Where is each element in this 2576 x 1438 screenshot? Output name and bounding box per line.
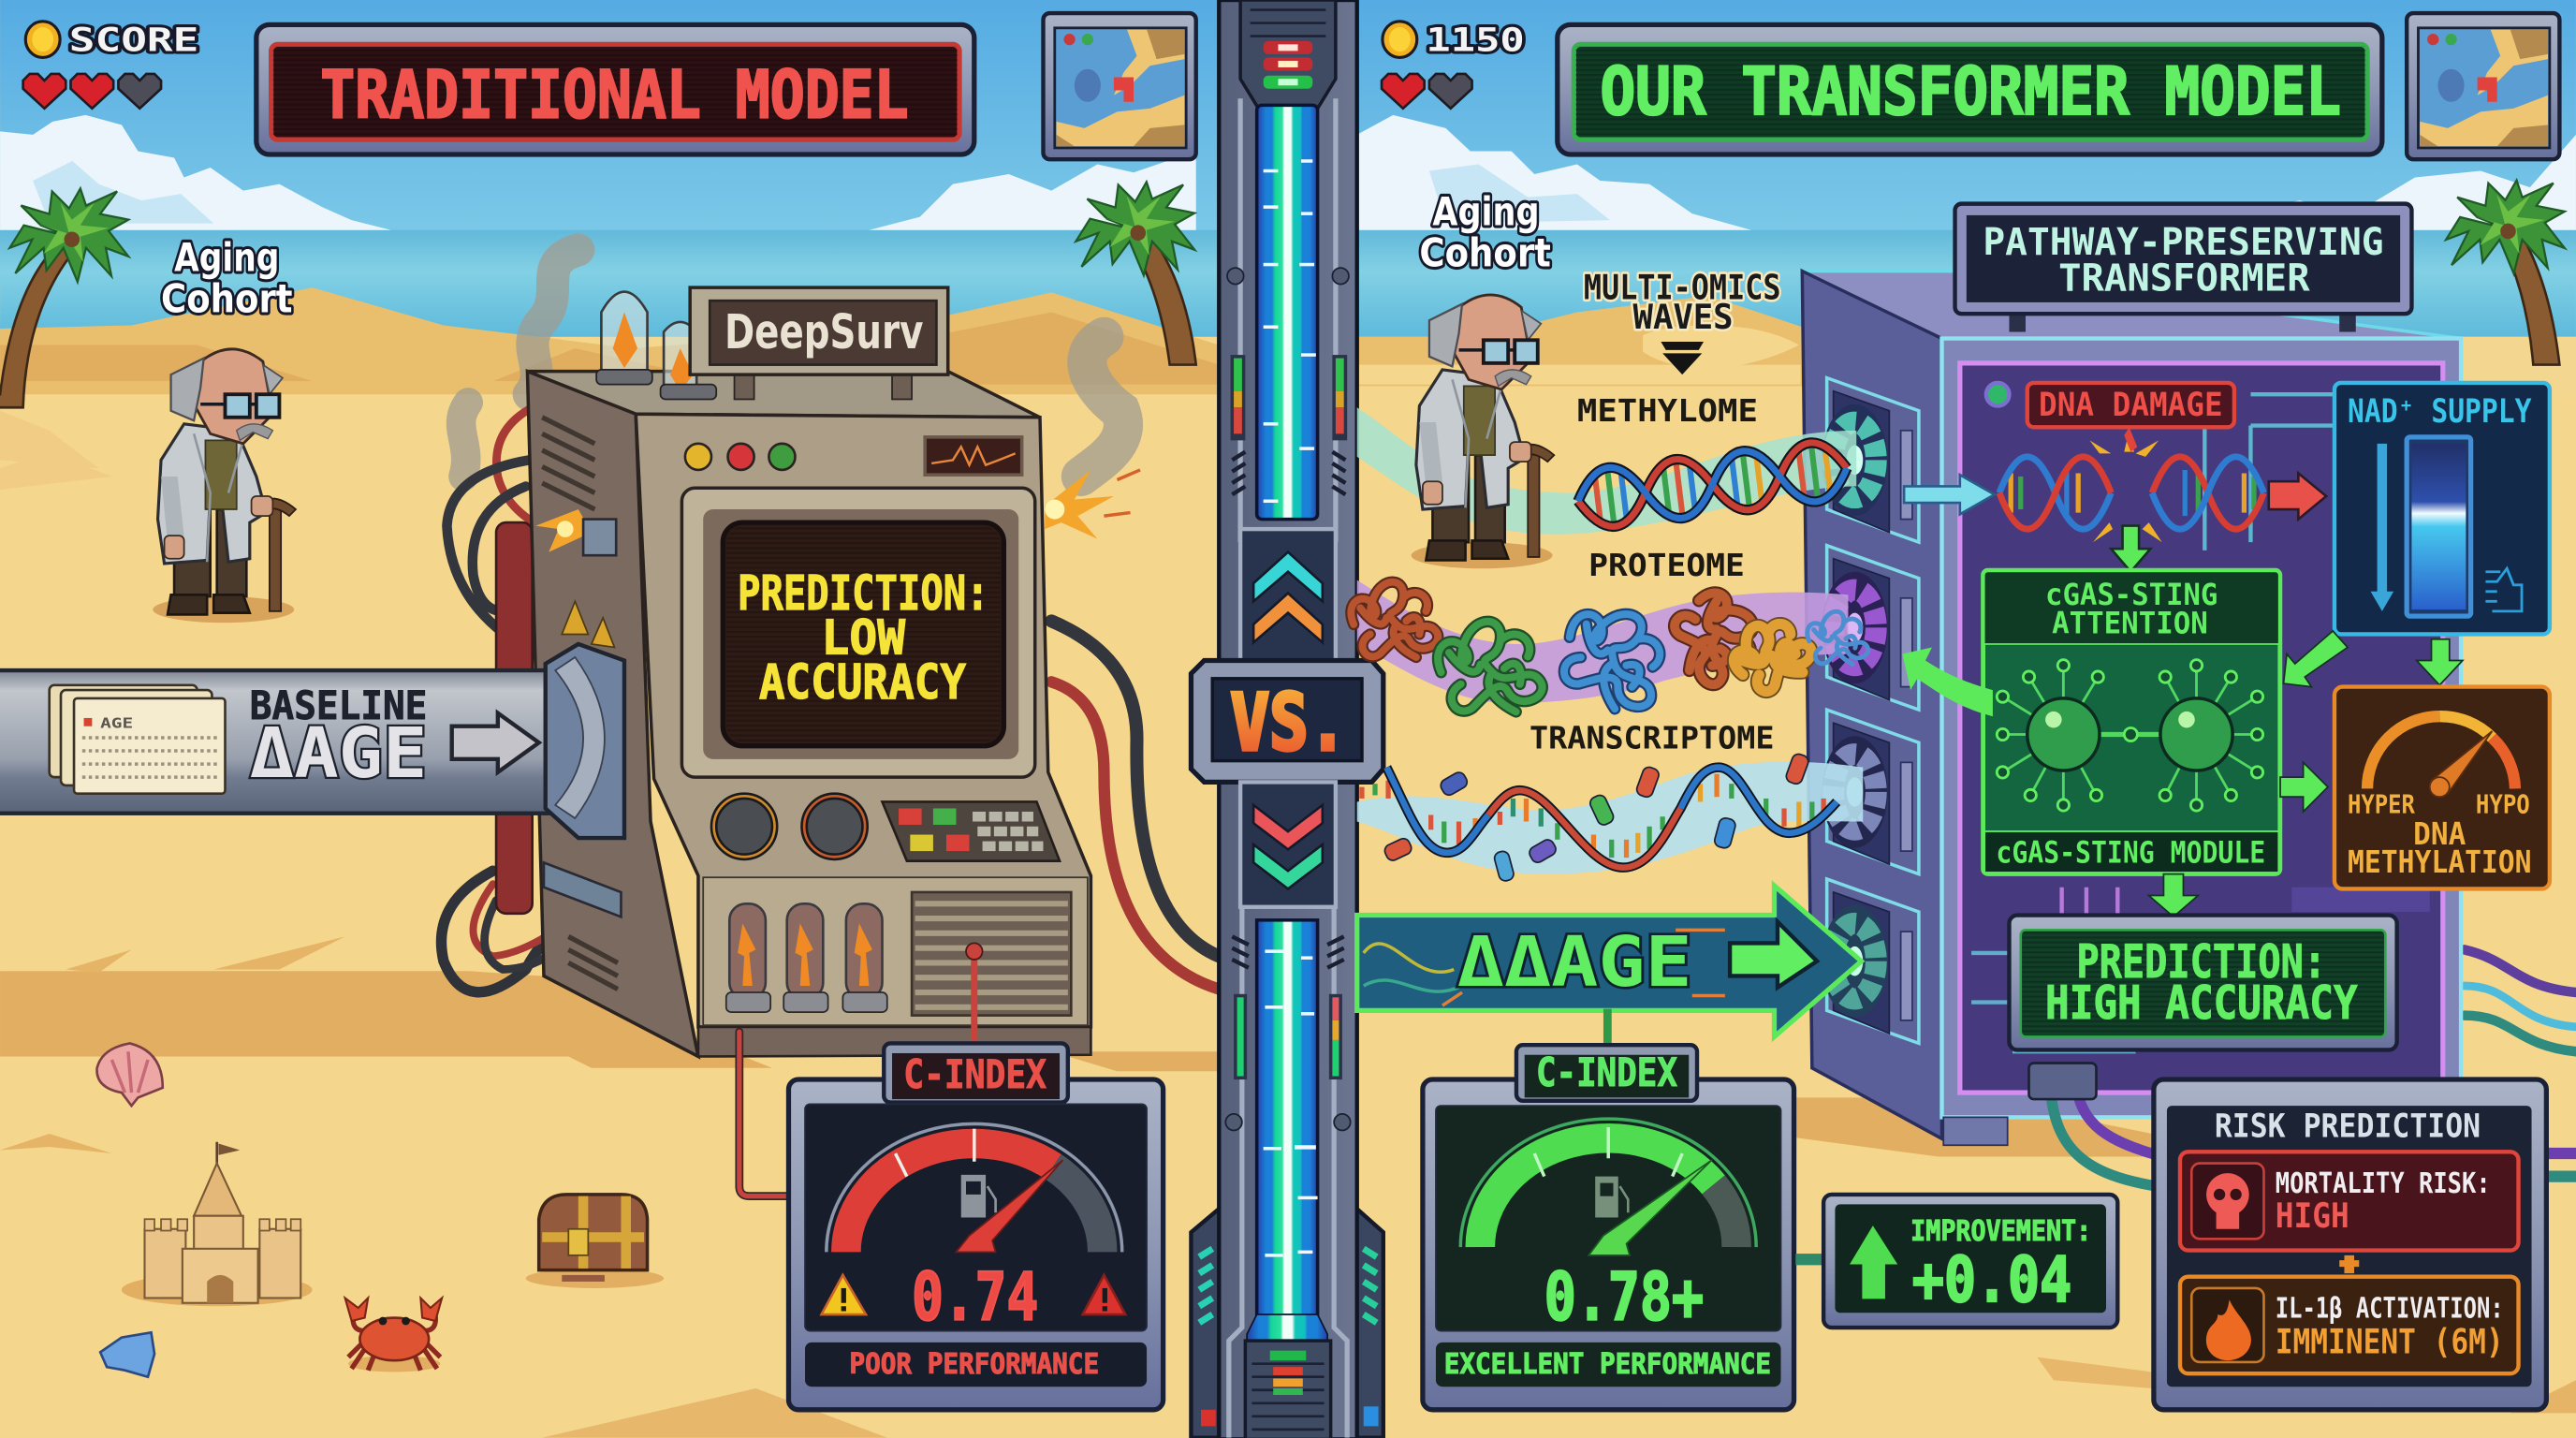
mortality card: HIGH: [2276, 1196, 2349, 1236]
c-index tab: [884, 1043, 1068, 1103]
glass bulbs: [596, 292, 716, 399]
server front face: [1942, 339, 2461, 1117]
circuit traces: [1971, 394, 2333, 1051]
arrow: module to prediction: [2149, 874, 2198, 917]
protein: blue small: [1808, 611, 1868, 664]
arrow: module to methylation: [2280, 762, 2328, 812]
arrow: glyph: [1730, 922, 1817, 988]
DeepSurv machine: [496, 287, 1140, 1056]
minimap left: [1044, 13, 1196, 159]
pathway-preserving transformer header: PATHWAY-PRESERVING: [1983, 220, 2384, 264]
icon: green status gem: [1986, 383, 2009, 405]
old man left: [153, 349, 296, 623]
methylation label: METHYLATION: [2348, 844, 2532, 880]
methylation label: [2348, 815, 2532, 880]
inner purple board: [1960, 363, 2443, 1093]
proteome label: PROTEOME: [1588, 547, 1745, 583]
arrow: methylome to damage: [1904, 475, 1995, 514]
machine side face: [527, 372, 698, 1056]
icon: flame: [2206, 1299, 2251, 1360]
status lights: [685, 444, 795, 470]
bottom flare right: [1354, 1206, 1383, 1438]
palm tree left: [0, 188, 128, 407]
icon: heart empty right: [1429, 74, 1472, 109]
DNA helix: damaged: [1999, 427, 2263, 542]
gauge dial: [1460, 1119, 1756, 1247]
fan 2 purple: [1822, 546, 1919, 710]
icon: heart full: [23, 74, 66, 109]
data cards: AGE: [100, 714, 133, 731]
connector: arrow to c-index: [1603, 1009, 1612, 1049]
sea band: [0, 230, 2576, 348]
status bar: [1436, 1343, 1781, 1387]
server left face: [1802, 271, 1942, 1138]
pathway-preserving transformer header: [1955, 204, 2411, 332]
aging cohort label left: [161, 235, 292, 321]
right HUD: score and lives: [1382, 21, 1525, 109]
NAD vial: [2407, 437, 2471, 616]
chevrons down box: [1240, 782, 1336, 907]
status bar: POOR PERFORMANCE: [849, 1348, 1099, 1381]
aging cohort label right: Cohort: [1419, 229, 1551, 275]
server top face: [1802, 271, 2461, 339]
DNA helix: methylome: [1574, 439, 1851, 531]
icon: heart empty: [118, 74, 161, 109]
arrow: attention feedback to fan: [1902, 647, 1993, 716]
DeepSurv sign: DeepSurv: [724, 305, 923, 360]
icon: fuel pump: [1595, 1177, 1628, 1217]
grill: [912, 892, 1071, 1016]
mini oscilloscope: [925, 437, 1022, 475]
NAD supply box: NAD⁺ SUPPLY: [2348, 392, 2532, 431]
gauge panel: traditional c-index: [788, 1043, 1164, 1410]
needle: [956, 1160, 1063, 1252]
gauge dial: [827, 1123, 1122, 1252]
arrow: damage to cGAS: [2111, 526, 2150, 572]
prediction text: [738, 566, 989, 711]
bottom module: [1245, 1341, 1331, 1438]
attention header: ATTENTION: [2052, 608, 2208, 641]
server cables right: [2465, 949, 2576, 1051]
multi-omics heading: WAVES: [1633, 297, 1734, 337]
protein: green: [1438, 622, 1543, 712]
arrow: NAD to cGAS: [2284, 631, 2348, 687]
multi-omics band: transcriptome wave: [1357, 762, 1863, 874]
needle: [1588, 1160, 1712, 1255]
hyper/hypo labels: HYPER: [2348, 791, 2416, 820]
sand dunes: [0, 287, 2576, 1438]
score label: SCORE: [69, 21, 198, 59]
smoke: [461, 250, 1123, 477]
sphere right: [2160, 698, 2232, 770]
server feet: [1943, 1117, 2008, 1145]
VS badge: [1191, 661, 1383, 782]
aging cohort label right: Aging: [1432, 188, 1540, 234]
palm tree right: [2446, 181, 2565, 365]
icon: coin right: [1383, 22, 1417, 57]
lower connector: [544, 862, 621, 917]
title text: OUR TRANSFORMER MODEL: [1600, 53, 2341, 130]
gauge panel: transformer c-index: [1423, 1045, 1794, 1410]
side plug: [583, 520, 616, 555]
prediction box: PREDICTION:: [2076, 934, 2326, 989]
bottom flare left: [1191, 1206, 1222, 1438]
sphere left: [2027, 698, 2100, 770]
machine cables left: [441, 407, 621, 992]
arrow: up: [1848, 1224, 1899, 1299]
delta age label: ΔΔAGE: [1457, 923, 1692, 1003]
protein: red: [1351, 582, 1438, 657]
pathway-preserving transformer header: TRANSFORMER: [2058, 257, 2310, 301]
sky background: [0, 0, 2576, 287]
methylome label: METHYLOME: [1577, 392, 1758, 429]
aging cohort label right: [1419, 188, 1551, 275]
prediction box: HIGH ACCURACY: [2045, 976, 2358, 1030]
multi-omics band: proteome wave: [1357, 580, 1848, 703]
improvement box: +0.04: [1912, 1243, 2071, 1316]
status bar: [805, 1343, 1147, 1387]
monitor bezel: [681, 488, 1035, 777]
protein: orange-red: [1667, 583, 1767, 691]
improvement box: IMPROVEMENT:: [1910, 1215, 2091, 1248]
attention header: cGAS-STING: [2045, 579, 2217, 612]
hyper/hypo labels: [2348, 791, 2530, 820]
mortality card: MORTALITY RISK:: [2276, 1167, 2491, 1200]
beach decor: sand castle: [122, 1142, 313, 1306]
arrow: NAD to methylation: [2417, 639, 2463, 685]
fan 4 green: [1822, 879, 1919, 1043]
aging cohort label left: Aging: [174, 235, 279, 281]
chevrons up box: [1240, 529, 1336, 661]
central divider column: [1191, 0, 1383, 1438]
icon: fuel pump: [961, 1175, 996, 1217]
protein: gold: [1723, 608, 1819, 700]
icon: skull: [2206, 1173, 2249, 1229]
icon: heart full right: [1382, 74, 1425, 109]
aging cohort label left: Cohort: [161, 275, 292, 321]
icon: coin: [25, 22, 60, 57]
fan 3 slate: [1822, 710, 1919, 874]
button panel: [883, 801, 1060, 861]
plus sign: [2339, 1255, 2359, 1273]
small icon: [2485, 568, 2522, 611]
nixie tubes: [726, 903, 887, 1012]
connector wires to left gauge: [739, 943, 983, 1196]
title text: TRADITIONAL MODEL: [320, 56, 909, 133]
multi-omics heading: [1584, 267, 1781, 374]
risk prediction panel: [2154, 1079, 2546, 1410]
attention header: [2045, 579, 2217, 641]
prediction text: ACCURACY: [759, 655, 966, 711]
clouds: [0, 115, 2576, 230]
methylation label: DNA: [2413, 815, 2466, 852]
value: 0.78+: [1544, 1258, 1704, 1335]
c-index tab: C-INDEX: [903, 1051, 1046, 1097]
old man right: [1412, 295, 1554, 568]
cables under server: [2029, 1064, 2157, 1186]
hyper/hypo labels: HYPO: [2476, 791, 2530, 820]
delta delta age arrow: [1357, 886, 1862, 1036]
c-index tab: C-INDEX: [1536, 1049, 1677, 1095]
tube frame: [1229, 98, 1347, 1438]
title panel: traditional model: [256, 24, 974, 154]
DNA methylation box: [2334, 687, 2550, 888]
score value: 1150: [1426, 21, 1525, 59]
IL-1 beta card: IMMINENT (6M): [2276, 1321, 2504, 1361]
pipe flange: [546, 644, 624, 838]
side vents: [542, 418, 618, 990]
beach decor: pink shell: [97, 1043, 163, 1106]
NAD supply box: [2334, 383, 2550, 634]
baseline label: BASELINE: [250, 682, 427, 728]
DNA damage box: DNA DAMAGE: [2039, 386, 2223, 424]
RNA strand: transcriptome: [1362, 753, 1837, 882]
left HUD: score and lives: [23, 21, 198, 109]
arrow: damage to NAD: [2269, 473, 2326, 520]
machine cables right: [1051, 621, 1219, 990]
energy tube bottom: [1247, 920, 1327, 1341]
machine base: [698, 1027, 1090, 1056]
prediction text: PREDICTION:: [738, 566, 989, 622]
knobs: [711, 794, 868, 859]
lower panel: [703, 877, 1088, 1025]
arrow: input flow: [452, 713, 539, 772]
beach decor: treasure chest: [526, 1195, 664, 1288]
arrow: depletion: [2371, 444, 2393, 611]
icon: heart full 2: [71, 74, 113, 109]
sparks: [535, 470, 1140, 552]
cGAS-STING module: [1983, 570, 2280, 874]
input pipe: [0, 644, 624, 838]
VS badge: VS.: [1231, 678, 1347, 768]
arrow: down: [1661, 342, 1704, 374]
prediction text: LOW: [822, 611, 905, 667]
cables right of risk panel: [2546, 1153, 2576, 1177]
beach decor: blue shell: [100, 1332, 154, 1377]
module footer: cGAS-STING MODULE: [1996, 836, 2265, 870]
transformer server chassis: [1802, 271, 2461, 1145]
connector: gauge to improvement: [1795, 1254, 1825, 1265]
transcriptome label: TRANSCRIPTOME: [1530, 719, 1774, 756]
machine rear red tank: [496, 522, 533, 914]
DeepSurv sign: [690, 287, 948, 374]
IL-1 beta card: [2180, 1277, 2519, 1373]
beach decor: crab: [345, 1298, 442, 1372]
delta age label: ΔAGE: [250, 714, 427, 794]
title panel: transformer model: [1558, 24, 2382, 154]
multi-omics heading: MULTI-OMICS: [1584, 267, 1781, 307]
damage sparks: [2089, 431, 2162, 542]
protein: blue: [1547, 592, 1683, 722]
minimap right: [2407, 13, 2559, 159]
sign posts: [735, 372, 912, 399]
machine top face: [527, 372, 1040, 418]
level meter strips top: [1227, 268, 1349, 494]
sand base: [0, 337, 2576, 1438]
palm tree mid: [1076, 182, 1196, 365]
warning yellow: [822, 1275, 866, 1314]
methylation gauge: [2367, 716, 2515, 797]
value: 0.74: [912, 1258, 1038, 1335]
status bar: EXCELLENT PERFORMANCE: [1444, 1348, 1771, 1381]
mortality card: [2180, 1152, 2519, 1251]
level meter strips bottom: [1225, 936, 1351, 1130]
prediction box: [2009, 916, 2397, 1049]
top module: [1240, 0, 1336, 109]
multi-omics band: methylome wave: [1357, 407, 1856, 535]
circuit field: [1984, 644, 2278, 831]
monitor screen: [723, 522, 1003, 746]
energy tube top: [1257, 105, 1318, 520]
warning red: [1083, 1275, 1125, 1314]
improvement box: [1823, 1195, 2117, 1328]
risk heading: RISK PREDICTION: [2215, 1107, 2481, 1145]
data cards: [50, 685, 225, 794]
IL-1 beta card: IL-1β ACTIVATION:: [2276, 1293, 2504, 1326]
fan 1 teal: [1822, 378, 1919, 542]
warning icons on side: [562, 601, 614, 647]
machine front face: [636, 414, 1090, 1027]
